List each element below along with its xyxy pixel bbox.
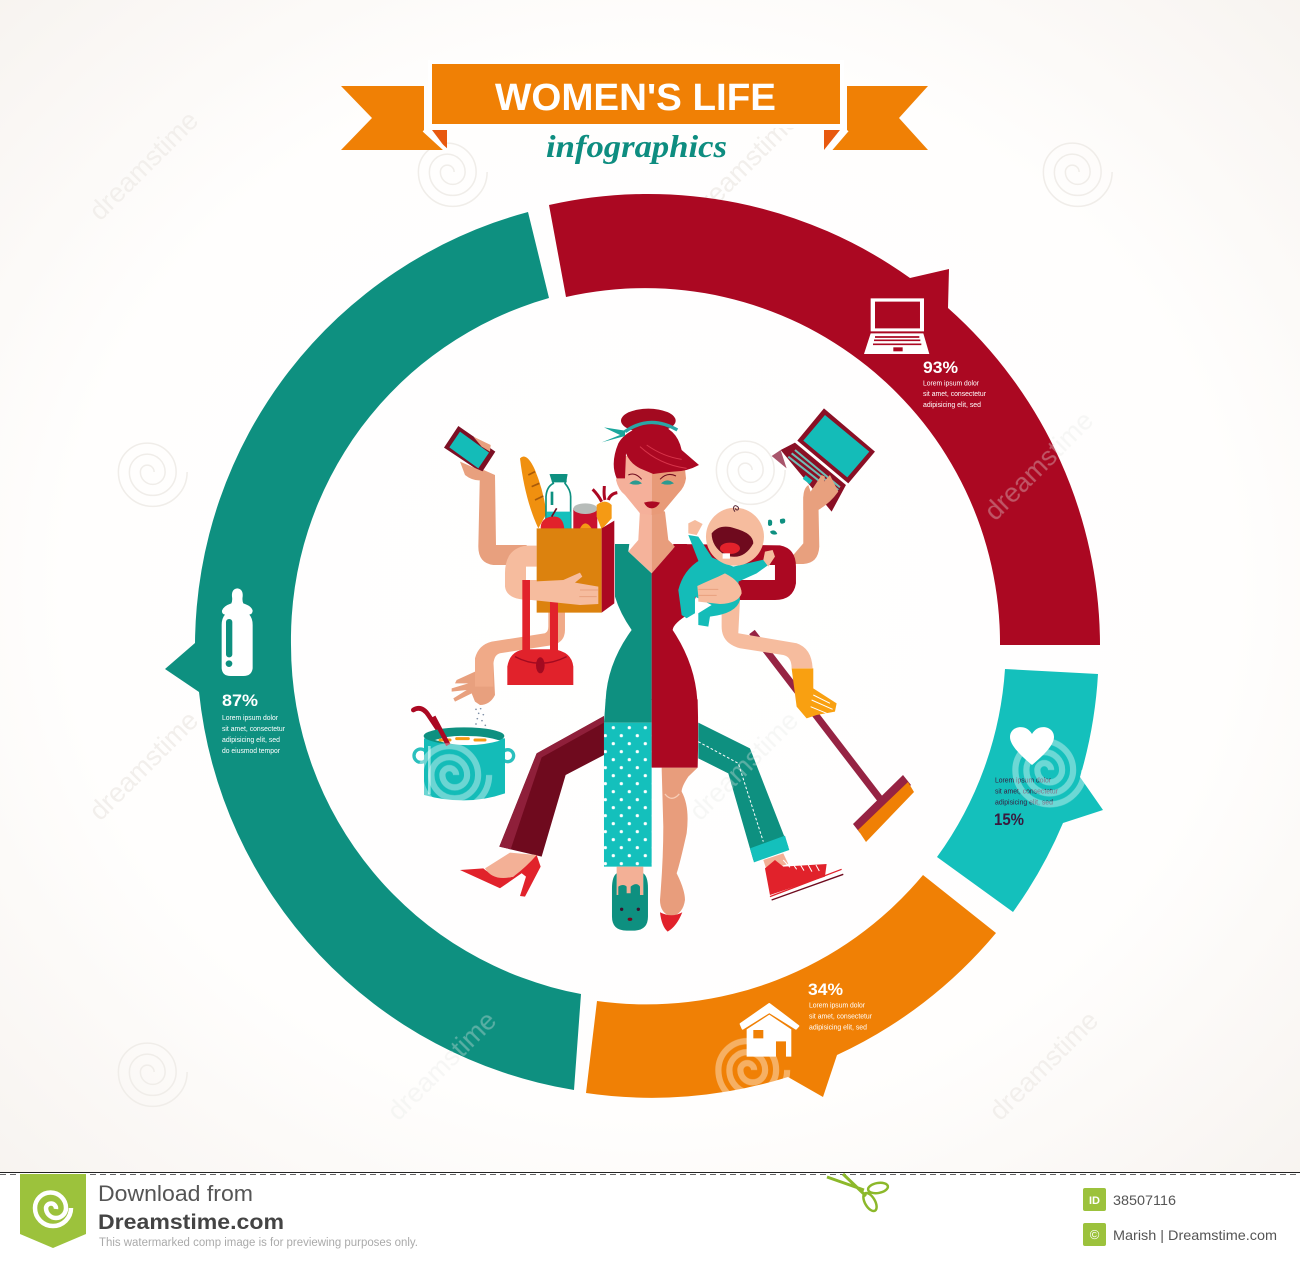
- slipper: [617, 867, 643, 897]
- light arm behind bag: [505, 546, 537, 600]
- text: lorem 93: [923, 378, 986, 409]
- pajama leg: [604, 723, 652, 867]
- neck: [628, 507, 652, 573]
- skirt: [604, 699, 652, 723]
- lips: [644, 501, 660, 508]
- watermark background: [83, 105, 1112, 1126]
- watermark overlay: dreamstime: [683, 705, 804, 826]
- laptop held: [772, 408, 875, 512]
- high heel: [460, 855, 541, 897]
- apple: [541, 516, 564, 529]
- dreamstime text: Dreamstime.com: [98, 1211, 284, 1234]
- legs and skirt: [413, 660, 843, 932]
- stat: 87%: 87%: [222, 691, 258, 710]
- eyes: [629, 480, 674, 485]
- right leg, teal trousers: [698, 723, 788, 860]
- watermark background: dreamstime: [983, 1005, 1104, 1126]
- crimson sleeve: [673, 544, 796, 600]
- yellow glove: [792, 668, 837, 718]
- hand holding baby: [697, 573, 742, 604]
- bare leg: [660, 768, 698, 917]
- broom: [752, 632, 914, 842]
- ring segment: family (teal): [165, 212, 581, 1090]
- ring segment: love (cyan): [937, 669, 1103, 912]
- sneaker: [765, 860, 827, 895]
- icon: house: [741, 1004, 798, 1057]
- watermark background: dreamstime: [683, 105, 804, 226]
- watermark overlay: dreamstime: [978, 405, 1099, 526]
- right arm holding laptop: [783, 497, 819, 564]
- red handbag: [522, 580, 558, 653]
- copyright badge: [1083, 1223, 1106, 1246]
- stat: 93%: 93%: [923, 358, 958, 377]
- salt arm: [475, 600, 565, 687]
- watermark background: dreamstime: [83, 705, 204, 826]
- text: lorem 34: adipisicing elit, sed: [809, 1022, 867, 1032]
- phone arm: [478, 468, 527, 565]
- icon: heart: [1010, 727, 1054, 765]
- title text: WOMEN'S LIFE: [495, 77, 776, 119]
- ring segment: work (crimson): [549, 194, 1100, 645]
- text: lorem 93: Lorem ipsum dolor: [923, 378, 979, 388]
- baby: [678, 506, 785, 627]
- text: lorem 34: sit amet, consectetur: [809, 1012, 872, 1020]
- text: lorem 87: sit amet, consectetur: [222, 724, 285, 733]
- ladle: [413, 708, 448, 745]
- text: lorem 87: adipisicing elit, sed: [222, 735, 280, 744]
- salt pinch hand: [452, 660, 495, 705]
- carrot: [593, 486, 617, 502]
- ribbon main band: [430, 62, 842, 126]
- id number: 38507116: [1113, 1192, 1176, 1208]
- hand on grocery bag: [532, 573, 598, 605]
- dreamstime ribbon logo: [20, 1174, 86, 1248]
- hair: [614, 424, 699, 478]
- download text: Download from: [98, 1181, 253, 1206]
- text: lorem 87: do eiusmod tempor: [222, 746, 280, 755]
- copyright badge: ©: [1090, 1227, 1100, 1242]
- text: lorem 93: sit amet, consectetur: [923, 389, 986, 398]
- salt grains: [475, 708, 486, 726]
- hair ribbon: [625, 422, 677, 432]
- arm with glove: [722, 600, 813, 668]
- left leg, burgundy trousers: [499, 716, 604, 857]
- text: lorem 15: adipisicing elit, sed: [995, 798, 1053, 806]
- author credit: Marish | Dreamstime.com: [1113, 1227, 1277, 1243]
- icon: scissors: [827, 1174, 889, 1213]
- ribbon right tail: [829, 86, 928, 150]
- bun: [621, 409, 676, 433]
- footer strip: [0, 1172, 1300, 1262]
- text: lorem 15: Lorem ipsum dolor: [995, 776, 1051, 784]
- stat: 34%: 34%: [808, 980, 843, 999]
- woman figure: [413, 408, 914, 932]
- id badge: [1083, 1188, 1106, 1211]
- icon: laptop: [864, 298, 929, 354]
- text: lorem 15: [995, 776, 1058, 806]
- watermark overlay: dreamstime: [381, 1005, 502, 1126]
- stat: 15%: 15%: [994, 810, 1024, 829]
- phone: [444, 426, 495, 473]
- text: lorem 34: Lorem ipsum dolor: [809, 1000, 865, 1010]
- title banner: [341, 62, 928, 164]
- grocery bag: [537, 528, 602, 613]
- face: [616, 450, 652, 515]
- text: lorem 87: [222, 713, 285, 755]
- subtitle: infographics: [546, 128, 727, 164]
- ring segment: home (orange): [586, 875, 996, 1098]
- ribbon left tail: [341, 86, 447, 150]
- head: [602, 409, 699, 515]
- icon: baby bottle: [222, 588, 253, 676]
- dress bodice: [606, 544, 652, 700]
- hand on laptop: [803, 475, 838, 510]
- notice text: This watermarked comp image is for previewing purposes only.: [99, 1237, 418, 1249]
- text: lorem 15: sit amet, consectetur: [995, 786, 1058, 796]
- text: lorem 87: Lorem ipsum dolor: [222, 713, 278, 722]
- watermark background: dreamstime: [83, 105, 204, 226]
- milk bottle: [546, 475, 571, 528]
- id badge: ID: [1089, 1195, 1100, 1207]
- cooking pot: [414, 749, 427, 762]
- baguette: [520, 457, 547, 528]
- upper body and arms: [444, 408, 875, 700]
- text: lorem 93: adipisicing elit, sed: [923, 400, 981, 409]
- watermark overlay: [381, 405, 1099, 1126]
- tin can: [573, 508, 597, 529]
- text: lorem 34: [809, 1000, 872, 1032]
